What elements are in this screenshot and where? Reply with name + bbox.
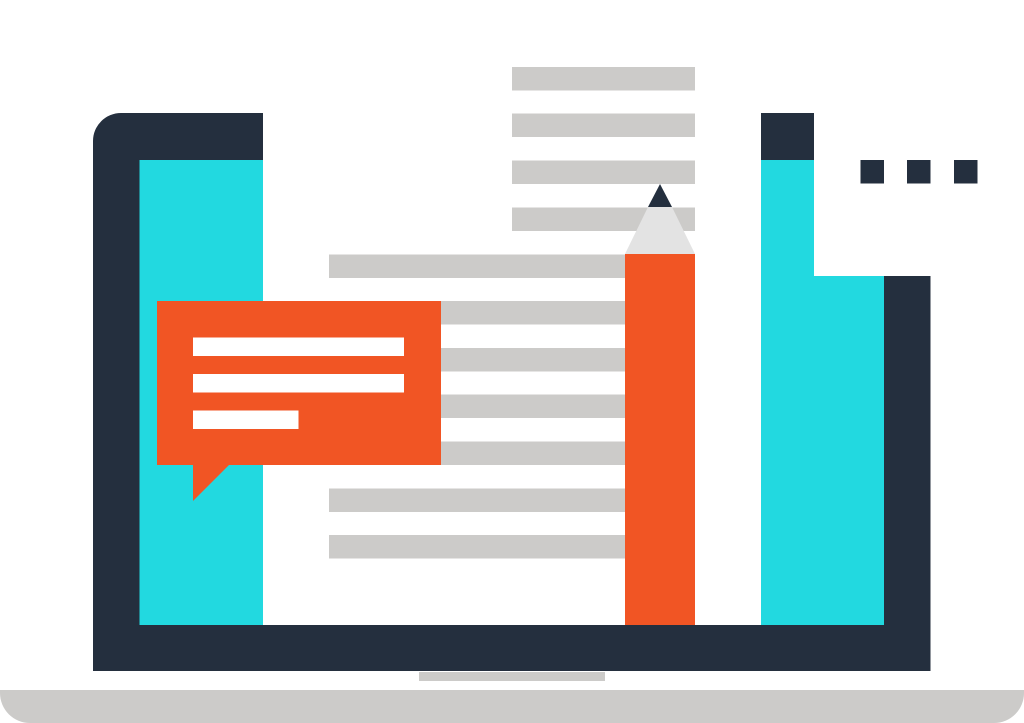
icon: pencil	[625, 184, 695, 625]
screen: right cyan panel	[761, 160, 884, 625]
laptop frame	[93, 113, 930, 671]
laptop base	[0, 690, 1024, 723]
laptop hinge	[419, 672, 605, 681]
speech bubble callout	[157, 301, 441, 501]
screen: left cyan panel	[140, 160, 263, 625]
document text lines: upper block	[512, 67, 695, 231]
document text lines: lower block	[329, 254, 625, 558]
window control dots	[860, 160, 978, 184]
